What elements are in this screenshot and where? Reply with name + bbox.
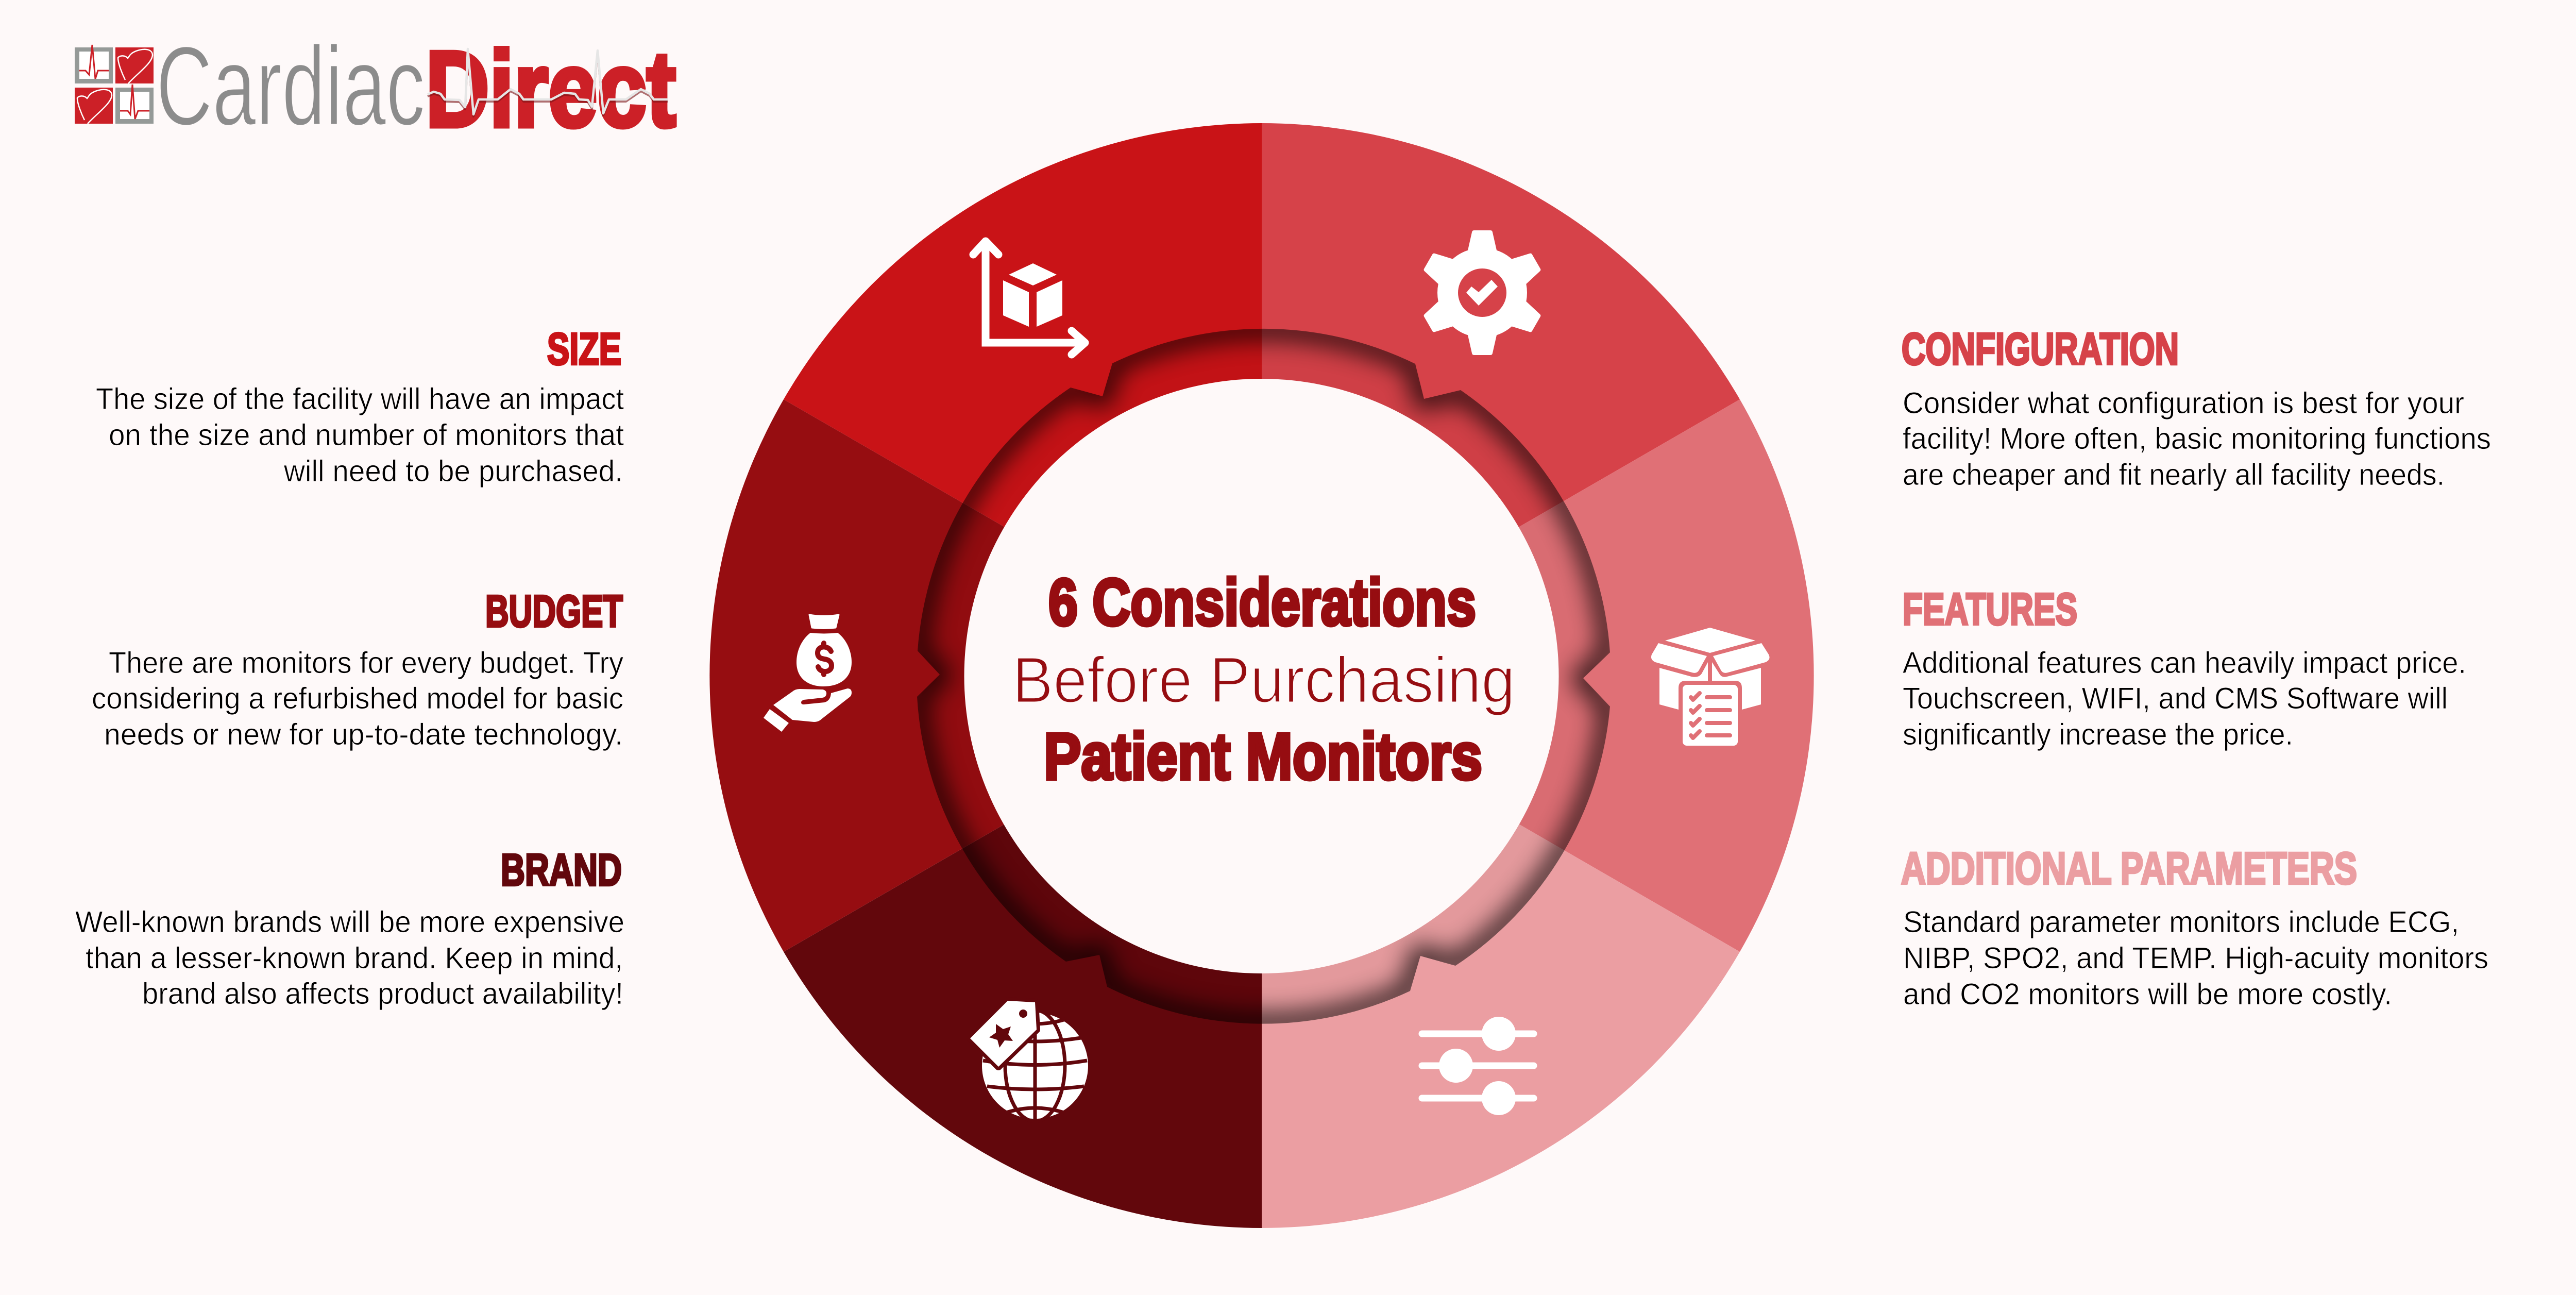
body: additional parameters: NIBP, SPO2, and TEMP. High-acuity monitors — [1903, 941, 2488, 975]
body: additional parameters — [1903, 905, 2488, 1011]
logo wordmark: Direct: Direct — [426, 29, 676, 149]
segment: additional parameters — [1262, 676, 1740, 1228]
title: Before Purchasing — [1012, 644, 1515, 716]
icon: box with checklist — [1651, 628, 1770, 746]
icon: gear with check — [1423, 232, 1541, 353]
logo ECG trace — [428, 49, 668, 116]
heading: size: SIZE — [547, 324, 621, 374]
logo icon: four monitor and heart squares — [75, 45, 154, 124]
title — [1012, 566, 1515, 794]
body: configuration: are cheaper and fit nearly all facility needs. — [1903, 458, 2445, 492]
icon: globe with price tag — [970, 1001, 1088, 1121]
body: size — [96, 382, 624, 488]
body: budget: There are monitors for every budget. Try — [109, 646, 623, 680]
icon: sliders — [1422, 1017, 1534, 1115]
heading: features: FEATURES — [1903, 584, 2077, 634]
body: brand: Well-known brands will be more expensive — [75, 905, 624, 939]
body: features: significantly increase the price. — [1903, 718, 2293, 751]
body: features — [1903, 646, 2466, 751]
body: brand — [75, 905, 624, 1011]
panel: additional parameters text — [1901, 844, 2488, 1011]
panel: budget text — [92, 586, 623, 751]
body: size: on the size and number of monitors that — [109, 418, 624, 452]
body: features: Touchscreen, WIFI, and CMS Software will — [1903, 682, 2448, 715]
body: brand: than a lesser-known brand. Keep in mind, — [86, 941, 623, 975]
body: brand: brand also affects product availability! — [142, 977, 623, 1011]
title: 6 Considerations — [1048, 566, 1476, 640]
panel: size text — [96, 324, 624, 488]
body: size: will need to be purchased. — [283, 455, 623, 488]
icon: money bag on hand — [764, 615, 852, 732]
body: features: Additional features can heavily impact price. — [1903, 646, 2466, 680]
logo: CardiacDirect — [75, 24, 676, 149]
body: budget: considering a refurbished model for basic — [92, 682, 623, 715]
segment: configuration — [1262, 123, 1740, 676]
panel: brand text — [75, 845, 624, 1011]
body: size: The size of the facility will have an impact — [96, 382, 624, 416]
segment: features — [1262, 399, 1814, 952]
segment: brand — [784, 676, 1262, 1228]
title: Patient Monitors — [1044, 720, 1482, 794]
body: additional parameters: Standard parameter monitors include ECG, — [1903, 905, 2459, 939]
segment: size — [784, 123, 1262, 676]
panel: configuration text — [1902, 324, 2491, 492]
heading: configuration: CONFIGURATION — [1902, 324, 2179, 374]
body: configuration: facility! More often, basic monitoring functions — [1903, 422, 2491, 456]
logo wordmark: Cardiac: Cardiac — [156, 24, 425, 149]
panel: features text — [1903, 584, 2466, 751]
body: additional parameters: and CO2 monitors will be more costly. — [1903, 978, 2392, 1011]
body: budget — [92, 646, 623, 751]
heading: brand: BRAND — [501, 845, 622, 895]
heading: budget: BUDGET — [485, 586, 623, 636]
heading: additional parameters: ADDITIONAL PARAMETERS — [1901, 844, 2357, 894]
icon: cube with axes — [973, 241, 1085, 355]
center circle — [964, 379, 1559, 973]
inner recessed shadow ring — [917, 329, 1610, 1024]
body: configuration: Consider what configuration is best for your — [1903, 386, 2464, 420]
body: configuration — [1903, 386, 2491, 492]
chart: six segment ring — [709, 123, 1814, 1228]
segment: budget — [709, 399, 1262, 952]
body: budget: needs or new for up-to-date technology. — [104, 718, 623, 751]
